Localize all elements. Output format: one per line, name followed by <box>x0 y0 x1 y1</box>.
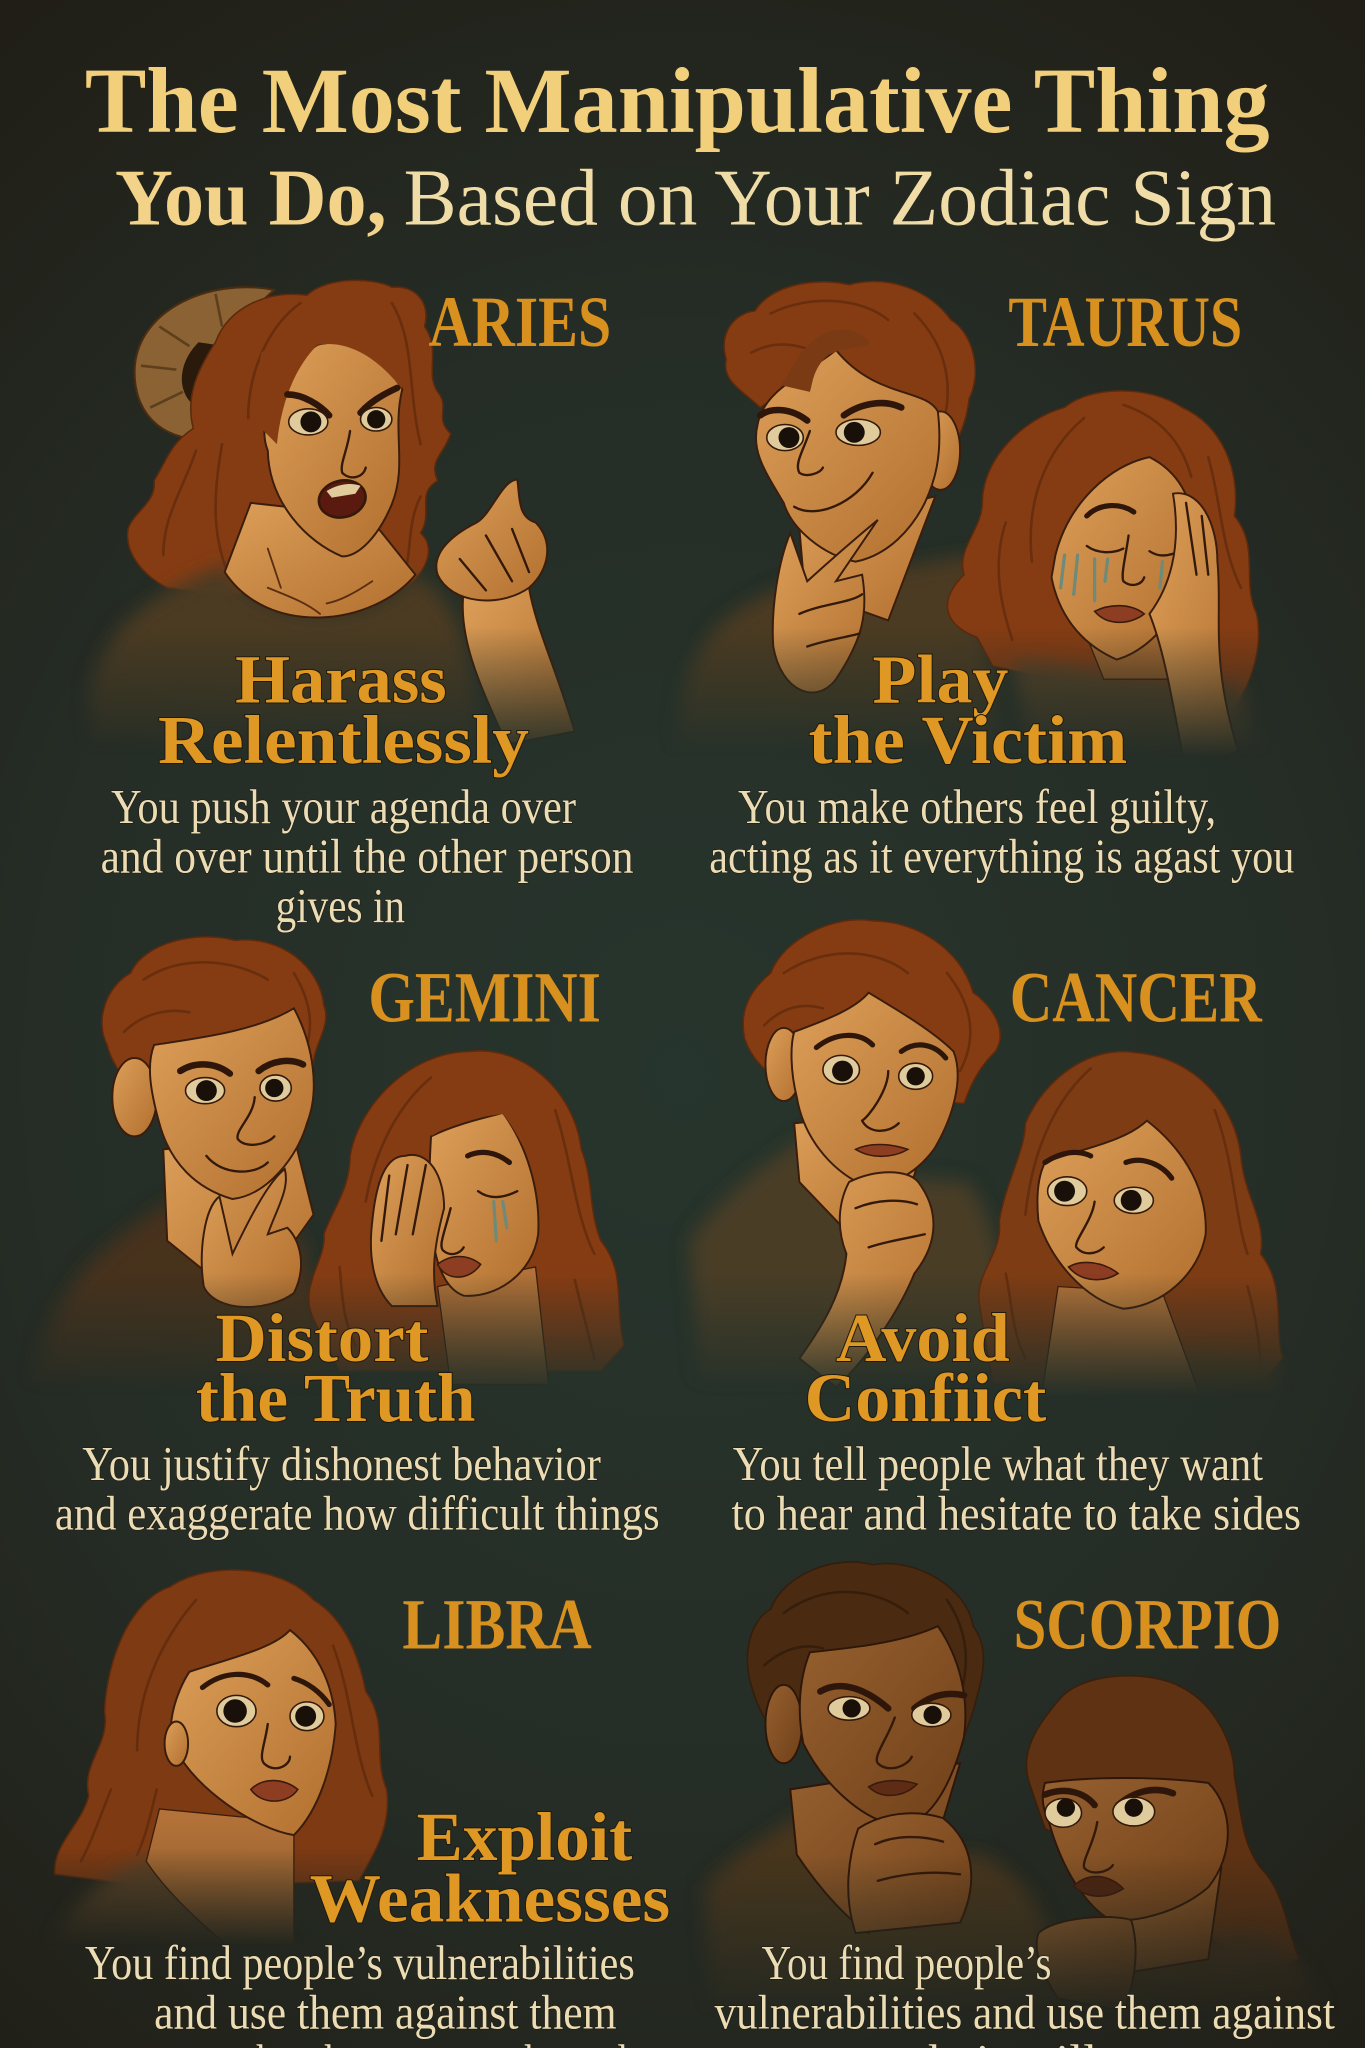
panel: Taurus <box>677 281 1294 883</box>
description: and exaggerate how difficult things <box>55 1487 660 1540</box>
sign label: TAURUS <box>1008 282 1242 362</box>
illustration: woman with ram horn pointing <box>89 280 575 744</box>
heading <box>158 641 529 778</box>
sign label: GEMINI <box>368 957 601 1037</box>
description: You tell people what they want <box>733 1438 1264 1491</box>
sign label: LIBRA <box>402 1584 592 1664</box>
title: You Do, <box>115 153 387 243</box>
illustration: smirking man and crying woman <box>677 281 1261 773</box>
title: Based on Your Zodiac Sign <box>404 153 1276 243</box>
heading: Harass <box>235 641 447 718</box>
description: to hear and hesitate to take sides <box>731 1487 1301 1540</box>
description: You make others feel guilty, <box>738 781 1216 834</box>
panel: Libra <box>52 1570 670 2048</box>
description <box>55 1438 660 1540</box>
description: You find people’s <box>762 1937 1052 1990</box>
illustration: worried woman <box>52 1570 388 1972</box>
heading: Confiict <box>805 1359 1046 1436</box>
panel: Scorpio <box>705 1562 1335 2048</box>
heading: the Truth <box>196 1359 475 1436</box>
heading <box>805 1299 1046 1436</box>
heading: Exploit <box>417 1798 632 1875</box>
description <box>101 781 634 933</box>
heading: Play <box>873 641 1008 718</box>
description: You justify dishonest behavior <box>82 1438 601 1491</box>
description: and over until the other person <box>101 830 634 883</box>
sign label: CANCER <box>1010 957 1263 1037</box>
heading: Weaknesses <box>310 1859 670 1936</box>
description: gives in <box>276 880 405 933</box>
panel: Gemini <box>33 937 660 1540</box>
description <box>709 781 1294 883</box>
heading: Distort <box>216 1299 428 1376</box>
description: acting as it everything is agast you <box>709 830 1294 883</box>
heading: the Victim <box>809 701 1127 778</box>
panel: Aries <box>89 280 634 933</box>
heading <box>196 1299 475 1436</box>
heading <box>310 1798 670 1936</box>
heading: Relentlessly <box>158 701 529 778</box>
description: and use them against them <box>154 1986 617 2039</box>
illustration: scheming man and crying woman <box>33 937 624 1384</box>
heading <box>809 641 1127 778</box>
description: You find people’s vulnerabilities <box>85 1937 635 1990</box>
description <box>85 1937 635 2048</box>
illustration: stern man and woman <box>702 1561 1300 2002</box>
illustration: worried man and woman <box>690 920 1283 1417</box>
description <box>731 1438 1301 1540</box>
heading: Avoid <box>836 1299 1010 1376</box>
description <box>715 1937 1335 2048</box>
sign label: ARIES <box>428 282 611 362</box>
sign label: SCORPIO <box>1014 1584 1281 1664</box>
title: The Most Manipulative Thing <box>85 50 1270 153</box>
panel: Cancer <box>690 920 1301 1540</box>
description: You push your agenda over <box>111 781 576 834</box>
title <box>85 50 1276 243</box>
